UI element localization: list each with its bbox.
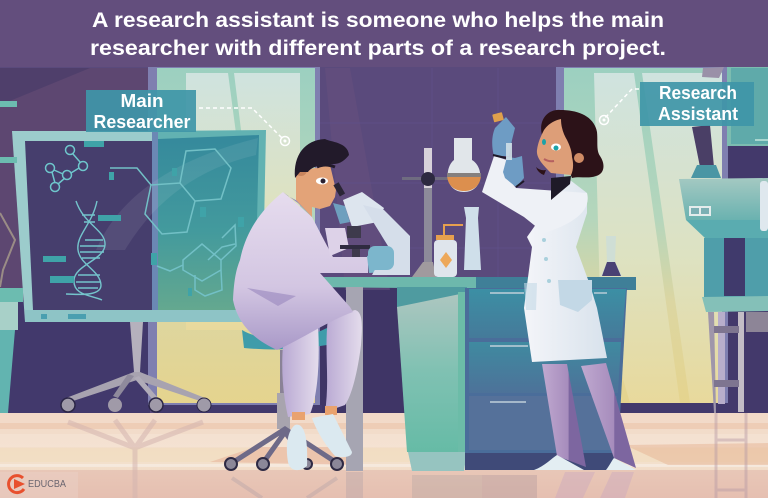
callout line: main researcher (199, 108, 290, 146)
buttons (542, 238, 551, 283)
face (537, 119, 573, 175)
molecule diagram (46, 146, 88, 192)
right table and stool (702, 296, 768, 498)
reflection of stand (68, 420, 203, 498)
pocket (558, 280, 592, 312)
callout line: research assistant (600, 89, 639, 124)
round flask (448, 138, 480, 192)
label: Research Assistant: Research (659, 83, 737, 103)
window band above floor (157, 405, 322, 413)
logo: EDUCBA (0, 472, 78, 498)
logo: EDUCBA: EDUCBA (28, 478, 66, 490)
hair (295, 139, 349, 178)
floor (0, 413, 768, 498)
board stand (61, 322, 211, 412)
hair (541, 110, 603, 178)
legs (542, 364, 586, 467)
top title banner: A research assistant is someone who helps the main (92, 9, 664, 32)
stool and man's lower body (225, 310, 362, 470)
man's trousers (282, 325, 319, 417)
desk (295, 277, 636, 471)
label: Research Assistant (640, 82, 754, 126)
microscope (333, 182, 410, 275)
chemical structure lines (110, 149, 236, 296)
shoes (534, 455, 584, 470)
label: Main Researcher (86, 90, 196, 132)
conical flask (601, 236, 622, 276)
label: Main Researcher: Researcher (94, 112, 190, 132)
top title banner: researcher with different parts of a research project. (90, 37, 666, 60)
left shelf fragments (0, 101, 23, 413)
lab coat body (524, 180, 607, 362)
lab hood machine (679, 67, 768, 298)
lab stand with flask (402, 138, 481, 277)
top title banner (0, 0, 768, 67)
test tube (492, 112, 504, 122)
wash bottle (434, 225, 463, 277)
glass cylinder (464, 207, 481, 270)
raised arm (482, 156, 588, 233)
DNA helix (66, 201, 105, 300)
reflection below desk (232, 472, 634, 498)
face and neck (296, 165, 336, 217)
turtleneck (551, 176, 571, 200)
woman: research assistant (482, 110, 636, 470)
whiteboard (12, 130, 266, 322)
cabinet top right (727, 67, 768, 146)
gloved hands (492, 117, 515, 156)
window right (556, 67, 728, 413)
rear sleeve (325, 228, 349, 256)
man: main researcher (233, 139, 395, 350)
lab coat (233, 192, 368, 350)
board labels (43, 141, 244, 296)
window left (148, 67, 320, 405)
man's gloved hands (367, 250, 395, 273)
label: Main Researcher: Main (120, 91, 164, 111)
label: Research Assistant: Assistant (658, 104, 738, 124)
